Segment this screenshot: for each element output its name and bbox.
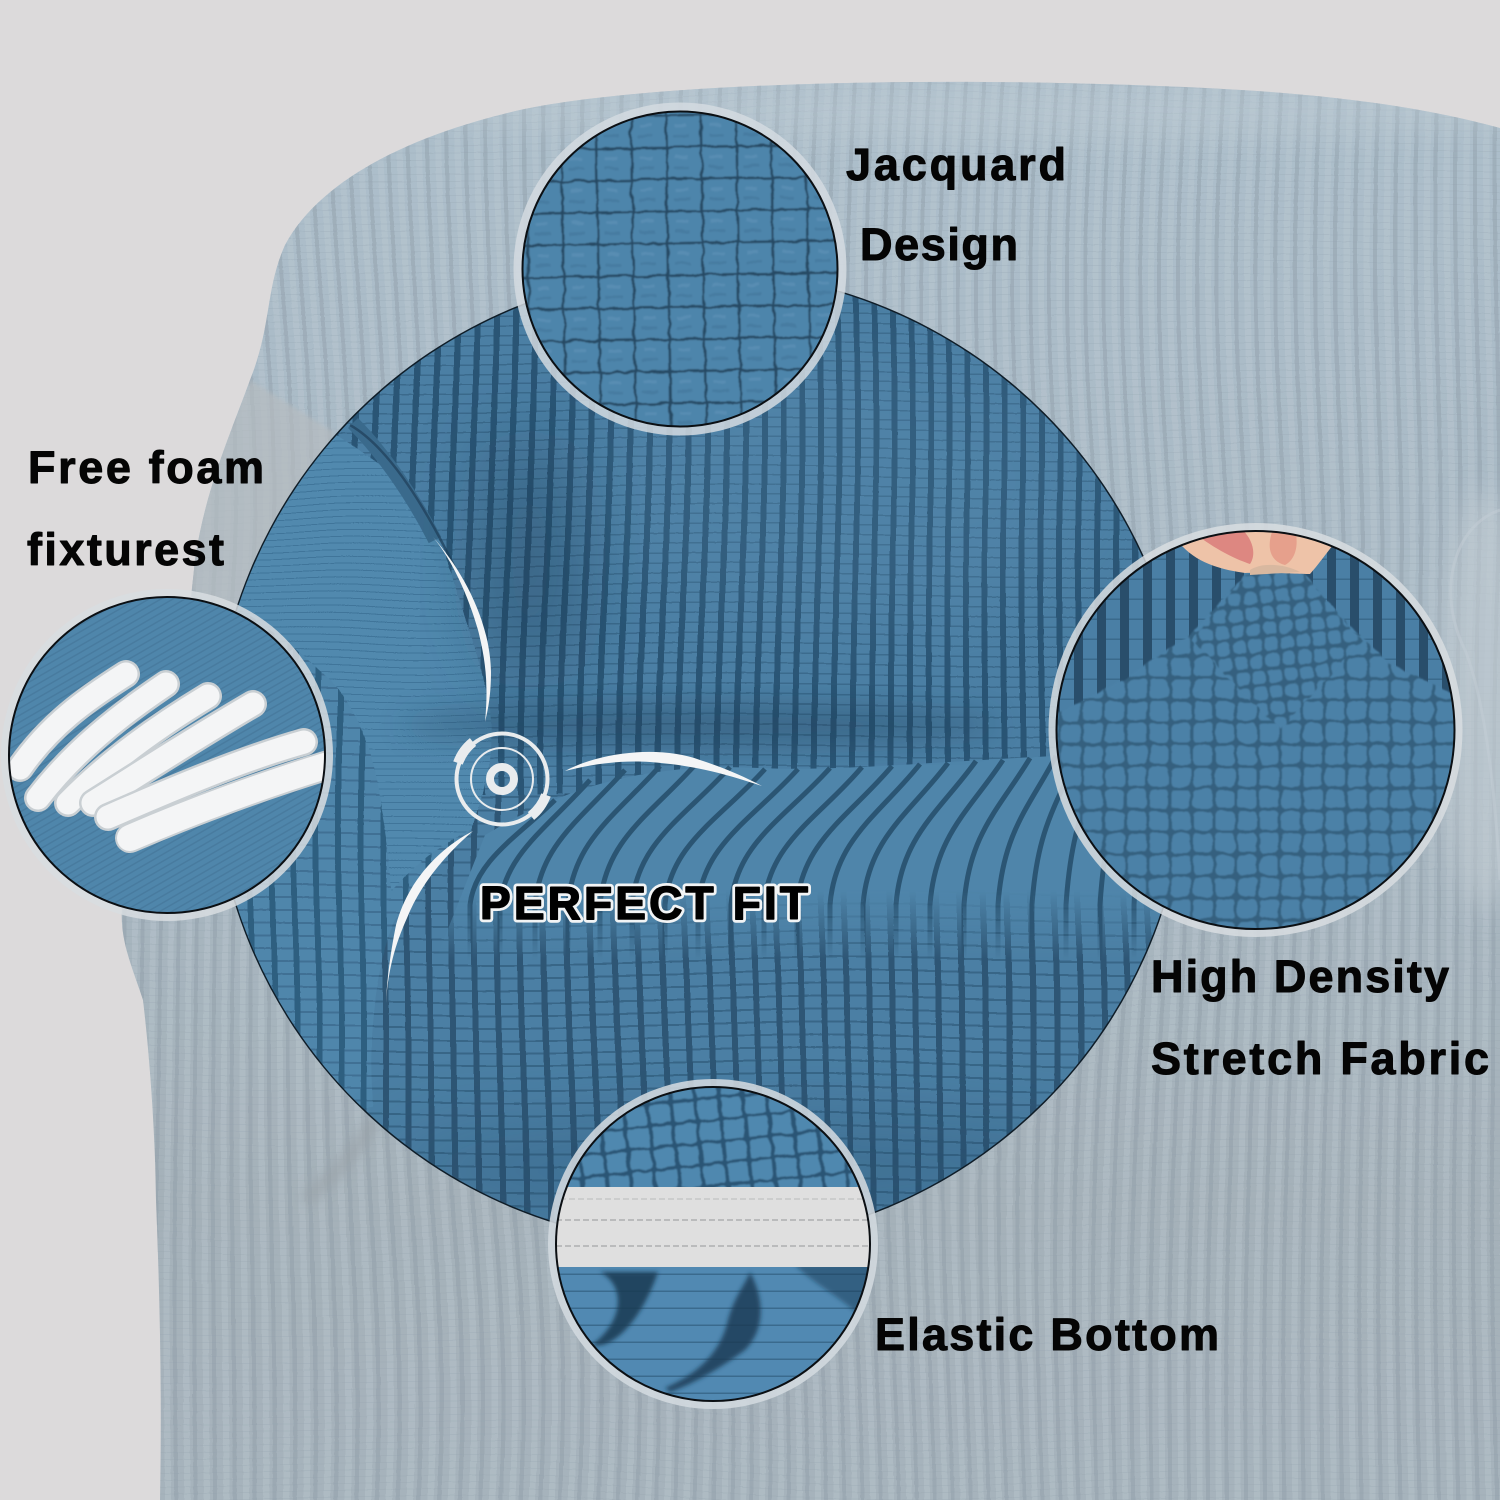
label: free foam fixturest: Free foam [28,442,264,493]
seat top ridges [444,756,1160,949]
label: high density stretch fabric: High Density [1151,951,1449,1002]
fabric peak with tighter weave [1192,573,1362,730]
label: high density stretch fabric [1151,951,1489,1084]
title: perfect fit: PERFECT FIT [480,877,808,929]
back rest texture [236,292,1145,795]
title: perfect fit: PERFECT FIT [480,877,808,929]
panel: high density stretch fabric circle [1040,523,1470,940]
label: jacquard design: Design [860,219,1018,270]
stretched fabric [1058,574,1454,928]
panel: jacquard design circle [510,100,850,440]
folds [558,1267,868,1400]
panel: main seat close-up circle [234,290,1164,1224]
shading [480,430,580,690]
label: high density stretch fabric: Stretch Fabric [1151,1033,1489,1084]
label: jacquard design [846,139,1066,270]
foam rods [20,674,345,838]
arrow swoosh: right [565,752,762,786]
label: jacquard design: Jacquard [846,139,1066,190]
seat front texture [237,794,1160,1222]
armrest [237,418,492,1108]
fingers [1182,532,1332,575]
label: free foam fixturest: fixturest [27,524,224,575]
icon: fit target [456,734,548,824]
panel: free foam fixtures circle [1,589,345,921]
label: elastic bottom: Elastic Bottom [875,1309,1219,1360]
label: free foam fixturest [27,442,264,575]
arrow swoosh: lower [386,831,473,1003]
panel: elastic bottom circle [548,1079,880,1410]
arrow swoosh: upper [433,537,491,722]
elastic band [550,1187,880,1267]
